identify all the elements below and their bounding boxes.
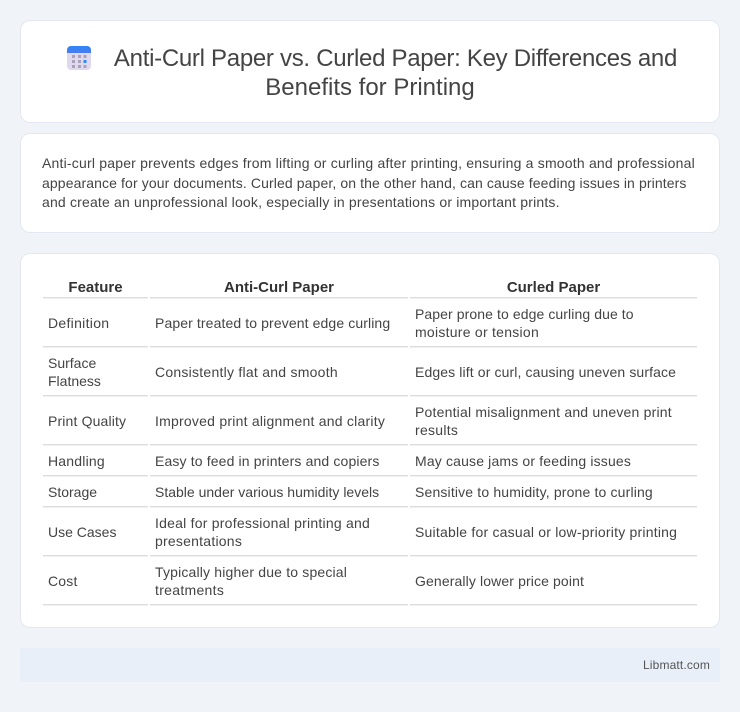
row: surface flatness: Flatness xyxy=(48,373,101,389)
table header: Feature xyxy=(68,279,123,296)
row: print quality: Potential misalignment and uneven print xyxy=(415,404,672,420)
row: use cases: Suitable for casual or low-priority printing xyxy=(415,524,677,540)
title xyxy=(114,45,677,101)
row: definition: Paper prone to edge curling due to xyxy=(415,306,634,322)
row: storage: Storage xyxy=(48,484,97,500)
row: surface flatness: Consistently flat and smooth xyxy=(155,364,338,380)
row: use cases: Ideal for professional printing and xyxy=(155,515,370,531)
table header: Curled Paper xyxy=(507,279,600,296)
panel: comparison table xyxy=(20,253,720,628)
table header: Anti-Curl Paper xyxy=(224,279,334,296)
row: storage: Sensitive to humidity, prone to curling xyxy=(415,484,653,500)
row: use cases: presentations xyxy=(155,533,242,549)
row: print quality xyxy=(48,404,672,438)
intro paragraph xyxy=(42,155,695,210)
row: definition: moisture or tension xyxy=(415,324,539,340)
intro paragraph: and create an unprofessional look, especially in presentations or important prints. xyxy=(42,194,560,210)
row: cost: Typically higher due to special xyxy=(155,564,347,580)
row: definition xyxy=(48,306,634,340)
row: handling xyxy=(48,453,631,469)
row: cost xyxy=(48,564,584,598)
row: storage: Stable under various humidity levels xyxy=(155,484,379,500)
row: cost: Cost xyxy=(48,573,78,589)
row: surface flatness xyxy=(48,355,676,389)
row: cost: treatments xyxy=(155,582,224,598)
title: Benefits for Printing xyxy=(265,74,475,101)
footer credit: Libmatt.com xyxy=(643,658,710,672)
footer xyxy=(20,648,720,682)
row: storage xyxy=(48,484,653,500)
icon: calendar xyxy=(67,46,91,70)
row: print quality: Improved print alignment and clarity xyxy=(155,413,385,429)
panel: intro text xyxy=(20,133,720,233)
intro paragraph: Anti-curl paper prevents edges from lifting or curling after printing, ensuring a smooth and professional xyxy=(42,155,695,171)
title: Anti-Curl Paper vs. Curled Paper: Key Differences and xyxy=(114,45,677,72)
row: surface flatness: Edges lift or curl, causing uneven surface xyxy=(415,364,676,380)
row: use cases xyxy=(48,515,677,549)
intro paragraph: appearance for your documents. Curled paper, on the other hand, can cause feeding issues in printers xyxy=(42,175,687,191)
panel: title card xyxy=(20,20,720,123)
row: use cases: Use Cases xyxy=(48,524,116,540)
row: cost: Generally lower price point xyxy=(415,573,584,589)
row: handling: Easy to feed in printers and copiers xyxy=(155,453,380,469)
row: print quality: results xyxy=(415,422,458,438)
row: handling: Handling xyxy=(48,453,105,469)
row: definition: Paper treated to prevent edge curling xyxy=(155,315,390,331)
row: surface flatness: Surface xyxy=(48,355,96,371)
row: print quality: Print Quality xyxy=(48,413,126,429)
table header xyxy=(68,279,600,296)
row: definition: Definition xyxy=(48,315,109,331)
row: handling: May cause jams or feeding issues xyxy=(415,453,631,469)
